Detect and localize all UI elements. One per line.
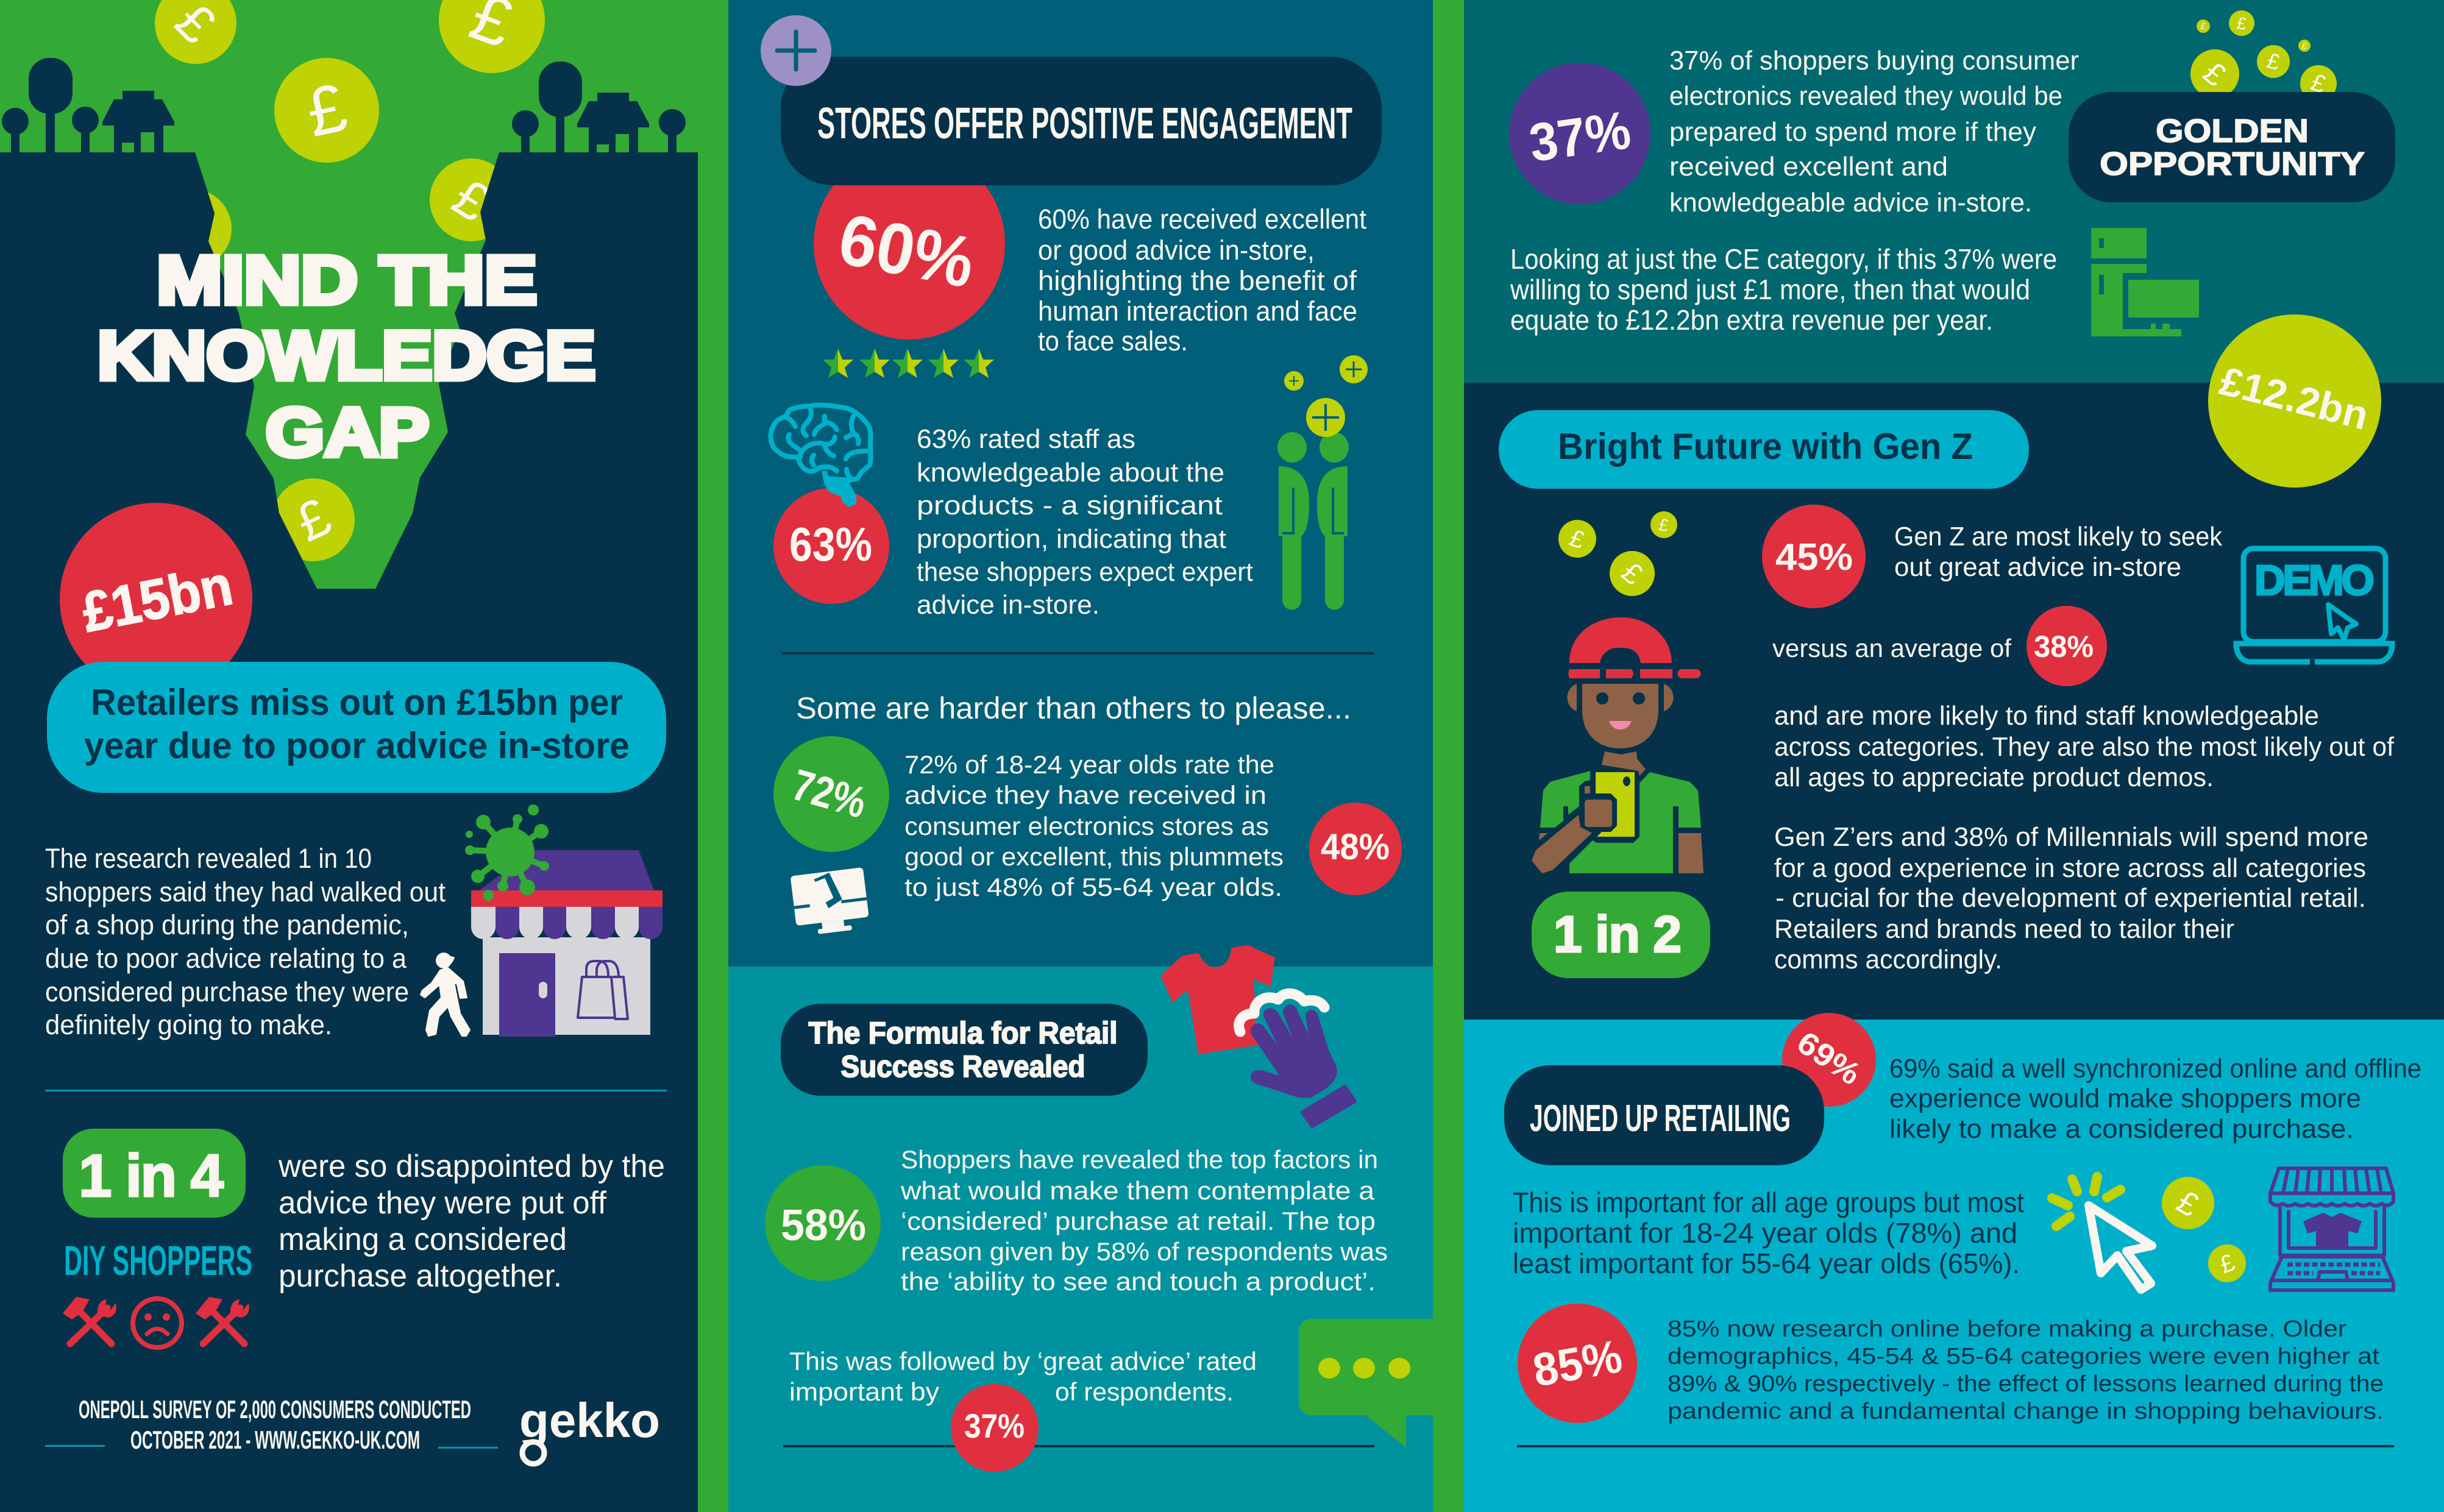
63% badge: 63% [789, 517, 872, 571]
rating stars [823, 349, 994, 378]
text: great advice: of respondents. [1055, 1377, 1234, 1406]
icon: online store laptop [2270, 1168, 2393, 1290]
icon: two people with plus signs [1277, 355, 1368, 609]
heading: golden opportunity: OPPORTUNITY [2100, 146, 2365, 182]
58% badge: 58% [781, 1201, 866, 1250]
60% badge: 60% [833, 199, 981, 303]
text: disappointed: purchase altogether. [279, 1258, 562, 1294]
37% badge: 37% [964, 1407, 1025, 1445]
icon: plus badge [761, 15, 831, 86]
callout pill: £15bn [47, 662, 666, 793]
icon: person with phone [1532, 617, 1703, 873]
icon: speech bubble [1299, 1319, 1433, 1447]
text: disappointed: were so disappointed by the [278, 1149, 665, 1184]
coins above golden pill: £ [2200, 21, 2207, 32]
45% badge [1762, 505, 1866, 608]
panel: joined up retailing background [1464, 1020, 2444, 1512]
text: gen z spend: Retailers and brands need to tailor their [1774, 914, 2234, 944]
text: research paragraph [45, 843, 446, 1040]
title: MIND THE [157, 242, 537, 318]
text: great advice: This was followed by ‘great advice’ rated [789, 1347, 1257, 1375]
text: age groups: least important for 55-64 year olds (65%). [1513, 1248, 2020, 1279]
text: gen z advice: out great advice in-store [1894, 552, 2181, 582]
text: gen z advice [1894, 522, 2223, 582]
skyline left [2, 58, 174, 153]
logo: gekko: gekko [519, 1393, 660, 1447]
coins above person [1553, 509, 1679, 605]
text: 69% synchronized: likely to make a considered purchase. [1889, 1114, 2354, 1144]
footer: survey source: ONEPOLL SURVEY OF 2,000 CONSUMERS CONDUCTED [79, 1395, 471, 1424]
text: versus average: versus an average of [1772, 634, 2011, 662]
60% badge [814, 148, 1005, 339]
title: KNOWLEDGE [98, 318, 595, 394]
text: 37% of shoppers: 37% of shoppers buying consumer [1669, 46, 2079, 76]
text: 72% of 18-24: to just 48% of 55-64 year olds. [904, 873, 1282, 901]
text: great advice [789, 1347, 1257, 1406]
icon: sad face [133, 1299, 182, 1347]
text: 60% advice: human interaction and face [1038, 296, 1357, 327]
icon: demo laptop: DEMO [2254, 556, 2375, 604]
ground with chasm [0, 152, 698, 1512]
text: research online [1668, 1316, 2384, 1424]
text: 63% staff: advice in-store. [917, 590, 1099, 620]
85% badge [1518, 1304, 1637, 1423]
text: 72% of 18-24: 72% of 18-24 year olds rate the [904, 750, 1274, 779]
text: 60% advice [1038, 204, 1366, 357]
coins above golden pill: £ [2301, 40, 2307, 51]
text: 60% advice: 60% have received excellent [1038, 204, 1366, 235]
72% badge [773, 736, 889, 852]
text: research paragraph: due to poor advice relating to a [45, 943, 407, 974]
text: 72% of 18-24: advice they have received in [904, 781, 1266, 809]
text: research paragraph: of a shop during the pandemic, [45, 909, 409, 940]
coins near cursor: £ [2216, 1249, 2238, 1279]
text: top factors: ‘considered’ purchase at retail. The top [901, 1207, 1376, 1235]
coins above golden pill: £ [2307, 69, 2329, 98]
text: staff knowledgeable: all ages to appreciate product demos. [1774, 762, 2214, 792]
38% badge [2027, 606, 2107, 686]
icon: crossed tools [63, 1297, 116, 1344]
text: age groups [1513, 1187, 2024, 1279]
stat pill: 1 in 2: 1 in 2 [1554, 906, 1682, 963]
falling coins: £ [300, 69, 353, 151]
coins near cursor [2152, 1167, 2251, 1288]
text: gen z spend [1774, 822, 2368, 974]
subheading: harder to please: Some are harder than others to please... [796, 691, 1351, 725]
icon: shop [471, 850, 663, 1037]
37% purple badge [1509, 63, 1650, 204]
text: research online: 89% & 90% respectively - the effect of lessons learned during the [1668, 1371, 2384, 1397]
58% badge [765, 1165, 881, 1281]
heading: formula for retail: Success Revealed [841, 1049, 1085, 1084]
text: age groups: This is important for all age groups but most [1513, 1187, 2024, 1218]
38% badge: 38% [2034, 630, 2094, 664]
coins above golden pill [2181, 9, 2342, 108]
heading: formula for retail [781, 1004, 1148, 1096]
heading: golden opportunity [2069, 92, 2395, 202]
text: 63% staff [917, 424, 1253, 620]
text: 69% synchronized: 69% said a well synchronized online and offline [1889, 1054, 2421, 1084]
text: staff knowledgeable: and are more likely to find staff knowledgeable [1774, 701, 2319, 731]
text: top factors: reason given by 58% of respondents was [901, 1237, 1388, 1266]
text: gen z spend: Gen Z’ers and 38% of Millennials will spend more [1774, 822, 2368, 852]
text: 37% of shoppers [1669, 46, 2079, 218]
footer: survey source: OCTOBER 2021 - WWW.GEKKO-UK.COM [130, 1425, 420, 1454]
text: 60% advice: or good advice in-store, [1038, 235, 1315, 266]
text: research online: pandemic and a fundamental change in shopping behaviours. [1668, 1399, 2384, 1424]
text: 37% of shoppers: prepared to spend more if they [1669, 117, 2036, 147]
falling coins [138, 0, 560, 575]
text: disappointed [278, 1149, 665, 1294]
text: CE category: equate to £12.2bn extra revenue per year. [1510, 304, 1993, 336]
stat pill: 1 in 4 [63, 1129, 246, 1218]
text: gen z spend: comms accordingly. [1774, 945, 2002, 974]
text: research paragraph: definitely going to make. [45, 1009, 332, 1040]
icon: touching hand [1239, 993, 1355, 1126]
text: great advice: important by [789, 1377, 939, 1406]
text: research paragraph: shoppers said they had walked out [45, 876, 446, 907]
coins above golden pill: £ [2236, 13, 2248, 34]
text: disappointed: making a considered [279, 1222, 567, 1257]
48% badge [1309, 803, 1402, 895]
icon: brain [771, 405, 871, 507]
37% purple badge: 37% [1526, 99, 1634, 173]
icon: virus [465, 804, 549, 901]
footer: survey source [45, 1395, 498, 1454]
heading: stores offer positive engagement [781, 57, 1382, 185]
text: age groups: important for 18-24 year olds (78%) and [1513, 1217, 2017, 1249]
stat pill: 1 in 2 [1532, 892, 1710, 978]
title [98, 242, 595, 470]
heading: joined up retailing: JOINED UP RETAILING [1530, 1098, 1791, 1140]
text: 69% synchronized: experience would make shoppers more [1889, 1084, 2361, 1113]
text: 72% of 18-24: good or excellent, this plummets [904, 842, 1284, 871]
text: 37% of shoppers: electronics revealed they would be [1669, 81, 2062, 111]
text: 63% staff: these shoppers expect expert [917, 557, 1253, 587]
text: top factors: the ‘ability to see and touch a product’. [901, 1267, 1376, 1296]
icon: demo laptop [2236, 548, 2392, 665]
panel: column 1 mind the knowledge gap [0, 0, 698, 1512]
text: top factors: Shoppers have revealed the top factors in [901, 1145, 1378, 1174]
coins above person: £ [1566, 524, 1588, 554]
45% badge: 45% [1775, 536, 1853, 578]
text: 63% staff: 63% rated staff as [917, 424, 1135, 454]
text: top factors [900, 1145, 1388, 1296]
text: CE category: Looking at just the CE category, if this 37% were [1510, 243, 2057, 275]
title: GAP [266, 394, 429, 470]
72% badge: 72% [787, 761, 872, 828]
text: research paragraph: The research revealed 1 in 10 [45, 843, 372, 874]
text: 72% of 18-24: consumer electronics stores as [904, 812, 1269, 840]
panel: column 2 lower background [728, 967, 1433, 1512]
coins above person: £ [1615, 556, 1649, 591]
stat pill: 1 in 4: 1 in 4 [79, 1142, 224, 1209]
icon: click cursor [2052, 1177, 2152, 1290]
text: gen z advice: Gen Z are most likely to seek [1894, 522, 2223, 552]
text: research online: demographics, 45-54 & 55-64 categories were even higher at [1668, 1344, 2380, 1369]
icon: t-shirt [1160, 945, 1275, 1054]
£12.2bn badge [2208, 314, 2381, 488]
£15bn badge [60, 503, 252, 695]
icon: walking shopper [421, 953, 470, 1036]
text: CE category: willing to spend just £1 more, then that would [1510, 274, 2030, 305]
panel: gen z background [1464, 383, 2444, 1020]
text: 63% staff: products - a significant [917, 491, 1223, 520]
callout pill: £15bn: year due to poor advice in-store [84, 725, 630, 766]
coins above golden pill: £ [2197, 55, 2233, 93]
text: gen z spend: for a good experience in store across all categories [1774, 853, 2366, 883]
heading: joined up retailing [1504, 1065, 1824, 1165]
skyline right [512, 62, 686, 153]
falling coins: £ [287, 486, 339, 553]
text: 60% advice: highlighting the benefit of [1038, 265, 1357, 296]
heading: formula for retail: The Formula for Retail [808, 1016, 1118, 1050]
text: research online: 85% now research online before making a purchase. Older [1668, 1316, 2346, 1342]
heading: stores offer positive engagement: STORES OFFER POSITIVE ENGAGEMENT [817, 99, 1352, 148]
label: DIY shoppers: DIY SHOPPERS [64, 1237, 252, 1284]
85% badge: 85% [1529, 1330, 1626, 1397]
£12.2bn badge: £12.2bn [2215, 358, 2373, 438]
text: staff knowledgeable [1774, 701, 2395, 792]
heading: bright future with gen z [1499, 410, 2029, 489]
text: CE category [1510, 243, 2057, 336]
text: staff knowledgeable: across categories. They are also the most likely out of [1774, 732, 2395, 762]
heading: golden opportunity: GOLDEN [2156, 113, 2309, 149]
text: research paragraph: considered purchase they were [45, 976, 409, 1007]
heading: bright future with gen z: Bright Future with Gen Z [1558, 426, 1973, 467]
falling coins: £ [442, 166, 500, 233]
text: 37% of shoppers: knowledgeable advice in-store. [1669, 188, 2032, 218]
69% badge [1782, 1013, 1876, 1107]
text: 69% synchronized [1889, 1054, 2421, 1144]
coins above golden pill: £ [2264, 48, 2282, 75]
69% badge: 69% [1791, 1024, 1867, 1092]
panel: golden opportunity background [1464, 0, 2444, 383]
£15bn badge: £15bn [77, 554, 238, 644]
coins near cursor: £ [2170, 1183, 2205, 1224]
text: 72% of 18-24 [904, 750, 1284, 901]
text: 60% advice: to face sales. [1038, 325, 1188, 357]
panel: column 2 upper background [728, 0, 1433, 967]
37% badge [951, 1384, 1039, 1472]
text: 63% staff: proportion, indicating that [917, 524, 1226, 554]
text: disappointed: advice they were put off [279, 1185, 607, 1221]
text: gen z spend: - crucial for the development of experiential retail. [1775, 883, 2366, 913]
48% badge: 48% [1321, 826, 1390, 867]
text: top factors: what would make them contemplate a [900, 1176, 1375, 1205]
icon: monitor with phone [790, 867, 870, 937]
icon: crossed tools [196, 1297, 249, 1344]
text: 37% of shoppers: received excellent and [1669, 152, 1948, 182]
icon: fridge and monitor [2091, 228, 2199, 336]
text: 63% staff: knowledgeable about the [917, 458, 1224, 488]
63% badge [773, 488, 889, 604]
coins above person: £ [1658, 515, 1671, 535]
callout pill: £15bn: Retailers miss out on £15bn per [91, 682, 623, 723]
